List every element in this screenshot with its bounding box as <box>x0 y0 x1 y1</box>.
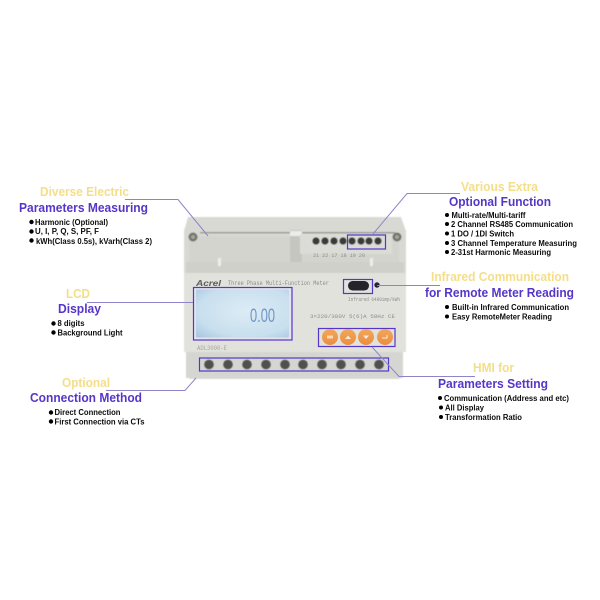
heading: Parameters Measuring: Parameters Measuring <box>19 201 148 215</box>
heading: Diverse Electric: Diverse Electric <box>40 185 129 199</box>
bullet list: Easy RemoteMeter Reading <box>452 312 552 322</box>
energy meter device <box>184 217 406 379</box>
bullet list: 1 DO / 1DI Switch <box>451 230 514 238</box>
callout: parameters measuring <box>19 185 152 246</box>
brand logo: Acrel <box>195 279 222 288</box>
callout: infrared communication <box>425 270 574 322</box>
LCD screen <box>194 288 292 340</box>
infrared port <box>344 280 380 294</box>
meter body <box>184 217 406 379</box>
infrared label: Infrared 6400imp/kWh <box>348 296 400 303</box>
callout: connection method <box>30 376 145 426</box>
heading: Optional Function: Optional Function <box>449 195 551 209</box>
heading: Infrared Communication: Infrared Communication <box>431 270 569 284</box>
bullet list <box>49 408 145 426</box>
HMI buttons <box>318 328 395 346</box>
callout: HMI <box>438 361 569 422</box>
top terminal highlight <box>348 235 386 249</box>
bullet list <box>29 218 152 246</box>
callout: optional function <box>445 180 577 257</box>
bullet list: All Display <box>445 404 485 412</box>
heading: Display: Display <box>58 302 101 316</box>
bullet list: Built-in Infrared Communication <box>452 303 569 312</box>
top terminals <box>312 238 382 244</box>
heading: LCD: LCD <box>66 287 90 301</box>
heading: for Remote Meter Reading: for Remote Meter Reading <box>425 286 574 300</box>
bullet list: kWh(Class 0.5s), kVarh(Class 2) <box>36 237 152 246</box>
bullet list: Harmonic (Optional) <box>35 218 108 227</box>
bullet list: Direct Connection <box>54 408 121 417</box>
ratings: 3×220/380V 5(6)A 50Hz CE <box>310 313 396 320</box>
bottom terminals <box>200 358 388 371</box>
heading: Parameters Setting: Parameters Setting <box>438 377 548 391</box>
bullet list <box>445 211 577 257</box>
LCD digits: 0.00 <box>250 306 275 327</box>
bullet list: Communication (Address and etc) <box>444 394 569 403</box>
terminal numbers: 21 22 17 18 19 20 <box>313 252 365 259</box>
bullet list: First Connection via CTs <box>54 418 145 426</box>
heading: HMI for: HMI for <box>473 361 514 375</box>
bullet list: 2-31st Harmonic Measuring <box>451 248 551 257</box>
bullet list <box>51 319 123 338</box>
product name: Three Phase Multi-Function Meter <box>228 280 329 287</box>
bullet list: Multi-rate/Multi-tariff <box>452 211 526 220</box>
bullet list <box>445 303 569 322</box>
bullet list: Transformation Ratio <box>445 413 522 422</box>
callout: LCD display <box>51 287 123 338</box>
bullet list <box>438 394 569 422</box>
bullet list: 2 Channel RS485 Communication <box>451 220 573 229</box>
bullet list: U, I, P, Q, S, PF, F <box>35 227 99 236</box>
bullet list: Background Light <box>58 328 123 338</box>
heading: Optional: Optional <box>62 376 110 390</box>
heading: Connection Method: Connection Method <box>30 391 142 405</box>
model label: ADL3000-E <box>197 345 227 352</box>
heading: Various Extra: Various Extra <box>461 180 539 194</box>
bullet list: 3 Channel Temperature Measuring <box>451 239 577 248</box>
bullet list: 8 digits <box>58 319 85 328</box>
leader lines <box>87 194 475 390</box>
